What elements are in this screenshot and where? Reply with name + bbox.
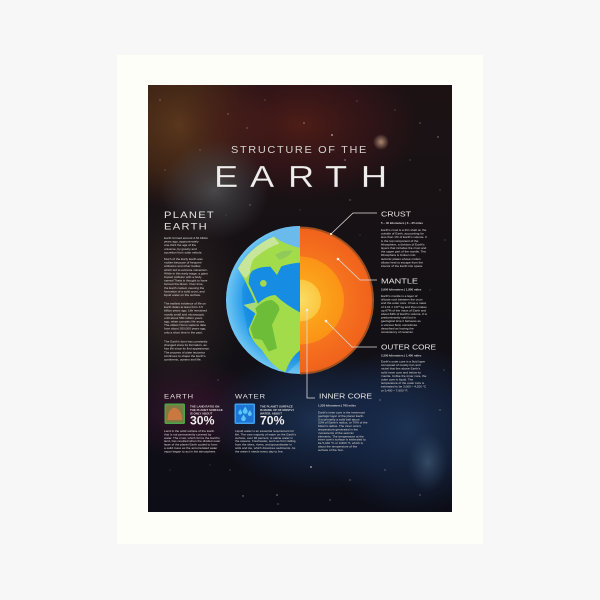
planet earth heading: EARTH bbox=[164, 222, 208, 232]
outer core panel: solid inner core and below its bbox=[381, 370, 421, 374]
outer core layer bbox=[300, 256, 344, 344]
planet earth body: until about 580 million years bbox=[164, 316, 203, 320]
outer core panel: composed of mostly iron and bbox=[381, 363, 421, 367]
inner core layer bbox=[300, 280, 321, 322]
crust panel: outside of Earth, accounting for bbox=[381, 232, 424, 236]
outer core panel: OUTER CORE bbox=[381, 344, 436, 352]
planet earth body: years ago, approximately bbox=[164, 240, 199, 244]
planet earth body: The Earth's form has constantly bbox=[164, 340, 208, 344]
planet earth body: The process of plate tectonics bbox=[164, 350, 206, 354]
outer core panel: estimated to be 3,000 – 4,200 °C bbox=[381, 385, 427, 389]
land caption: THE LAND RATIO ON bbox=[190, 404, 219, 408]
mantle panel: a viscous fluid, sometimes bbox=[381, 323, 418, 327]
planet earth body: the Earth cooled, causing the bbox=[164, 286, 204, 290]
inner core panel: 20% of Earth's radius, or 70% of the bbox=[318, 421, 368, 425]
crust panel: tectonic plates whose motion bbox=[381, 257, 421, 261]
planet earth body: ago, when complex life arose. bbox=[164, 320, 205, 324]
planet earth body: The oldest Homo sapiens date bbox=[164, 323, 206, 327]
planet earth body: named Theia is thought to have bbox=[164, 279, 208, 283]
crust panel: CRUST bbox=[381, 212, 412, 218]
land caption: THE PLANET SURFACE bbox=[190, 408, 223, 412]
crust pointer bbox=[331, 213, 377, 234]
land caption bbox=[190, 404, 223, 416]
planet earth body: only a short time in the past. bbox=[164, 330, 203, 334]
mantle panel: of 4.01 × 10²⁴ kg and thus makes bbox=[381, 305, 427, 309]
outer core panel: outer core is liquid. The bbox=[381, 378, 413, 382]
mantle layer bbox=[300, 228, 372, 372]
mantle panel: and the outer core. It has a mass bbox=[381, 301, 427, 305]
land body: land, has resulted when the divided outer bbox=[164, 439, 220, 443]
planet earth body: billion years ago. Life remained bbox=[164, 309, 207, 313]
crust panel: 5 – 40 kilometers | 3 – 25 miles bbox=[381, 221, 423, 225]
all text panels bbox=[164, 210, 436, 453]
planet earth body: accretion from solar nebula. bbox=[164, 250, 202, 254]
planet earth body: Earth formed around 4.54 billion bbox=[164, 236, 208, 240]
water caption: WATER, ABOUT bbox=[260, 412, 282, 416]
crust panel: is the top component of the bbox=[381, 239, 419, 243]
inner core panel: inner core's surface is estimated to bbox=[318, 438, 366, 442]
land body: that is not permanently covered by bbox=[164, 432, 212, 436]
inner core panel: movements of the seismic bbox=[318, 431, 354, 435]
mantle panel: about 84% of Earth's volume. It is bbox=[381, 312, 427, 316]
crust panel: allows heat to escape from the bbox=[381, 260, 423, 264]
mantle panel: MANTLE bbox=[381, 278, 418, 286]
inner core panel: elements. The temperature at the bbox=[318, 434, 364, 438]
inner core panel: about the temperature of the bbox=[318, 444, 357, 448]
planet earth body: mostly small and microscopic bbox=[164, 312, 205, 316]
inner core panel bbox=[318, 394, 372, 452]
inner core panel: surface of the Sun. bbox=[318, 448, 344, 452]
crust panel: lithosphere is broken into bbox=[381, 253, 416, 257]
planet earth body: universe, by gravity and bbox=[164, 247, 197, 251]
mantle panel: Earth's mantle is a layer of bbox=[381, 294, 417, 298]
outer core panel: mantle. Unlike the inner core, the bbox=[381, 374, 427, 378]
mantle panel: silicate rock between the crust bbox=[381, 298, 423, 302]
land body: layer of the planet Earth cooled to form bbox=[164, 443, 218, 447]
outer core pointer bbox=[326, 321, 377, 347]
planet earth body: collisions and other bodies bbox=[164, 264, 201, 268]
outer core panel: or 5,400 – 7,600 °F. bbox=[381, 388, 408, 392]
water caption: IS MADE UP OF MOSTLY bbox=[260, 408, 294, 412]
land body: Land is the solid surface of the Earth bbox=[164, 429, 214, 433]
planet earth body: has life since its first appearance. bbox=[164, 347, 210, 351]
water stat heading: WATER bbox=[235, 394, 266, 400]
inner core panel: INNER CORE bbox=[319, 394, 372, 400]
planet earth heading bbox=[164, 210, 215, 232]
land body: vapor began to act in the atmosphere. bbox=[164, 449, 216, 453]
planet earth body: one-third the age of the bbox=[164, 243, 196, 247]
callout lines bbox=[307, 213, 377, 398]
white mat bbox=[117, 55, 483, 544]
land icon bbox=[164, 404, 185, 424]
planet earth body: continues to shape the Earth's bbox=[164, 354, 206, 358]
planet earth body: formed the Moon. Over time, bbox=[164, 282, 204, 286]
outer core panel: Earth's outer core is a fluid layer bbox=[381, 360, 425, 364]
outer core panel bbox=[381, 344, 436, 392]
inner core panel: be 5,430 °C or 9,800 °F, which is bbox=[318, 441, 363, 445]
mantle panel: 2,900 kilometers | 1,800 miles bbox=[381, 288, 422, 292]
crust panel: interior of the Earth into space. bbox=[381, 264, 423, 268]
crust panel: Earth's crust is a thin shell on the bbox=[381, 228, 427, 232]
planet earth body: molten because of frequent bbox=[164, 261, 202, 265]
inner core pointer bbox=[307, 310, 315, 398]
70 percent: 70% bbox=[260, 414, 285, 428]
inner core panel: Earth's inner core is the innermost bbox=[318, 410, 365, 414]
crust panel bbox=[381, 212, 427, 268]
crust panel: the upper part of the mantle. The bbox=[381, 250, 426, 254]
title: STRUCTURE OF THE bbox=[231, 145, 368, 156]
crust panel: layers that includes the crust and bbox=[381, 246, 427, 250]
inner core panel: It is primarily a solid ball about bbox=[318, 417, 360, 421]
water caption: THE PLANET SURFACE bbox=[260, 404, 293, 408]
inner core panel: 1,220 kilometers | 760 miles bbox=[318, 404, 356, 408]
planet earth body: formation of a solid crust, and bbox=[164, 289, 205, 293]
water body: from the skies, rivers, and groundwater in bbox=[235, 443, 292, 447]
mantle panel: geological time it behaves as bbox=[381, 319, 421, 323]
planet earth body: Much of the Early Earth was bbox=[164, 257, 203, 261]
crust layer bbox=[300, 226, 374, 374]
planet earth body: Earth dates at least from 3.5 bbox=[164, 305, 203, 309]
planet earth body: liquid water on the surface. bbox=[164, 293, 201, 297]
land body: water. The crust, which forms the Earth's bbox=[164, 436, 220, 440]
mantle panel: predominantly solid but in bbox=[381, 316, 416, 320]
outer core panel: temperature of the outer core is bbox=[381, 381, 425, 385]
30 percent: 30% bbox=[190, 414, 215, 428]
mantle panel: up 67% of the mass of Earth and bbox=[381, 308, 426, 312]
water body: life. The vast majority of water on the Earth's bbox=[235, 432, 296, 436]
planet earth body: which led to extreme volcanism. bbox=[164, 268, 208, 272]
water body bbox=[235, 429, 296, 453]
planet earth body: continents, oceans and life. bbox=[164, 358, 202, 362]
poster background bbox=[148, 85, 452, 512]
inner core panel: geologic layer of the planet Earth. bbox=[318, 414, 364, 418]
earth stat heading: EARTH bbox=[164, 394, 194, 400]
mantle pointer bbox=[338, 259, 377, 280]
planet earth body: impact collision with a body bbox=[164, 275, 202, 279]
water body: Liquid water is an essential requirement for bbox=[235, 429, 294, 433]
planet earth body: changed since its formation, as bbox=[164, 343, 207, 347]
planet earth body bbox=[164, 236, 210, 362]
inner core panel: Moon's radius. The inner core's bbox=[318, 424, 361, 428]
planet earth body: The earliest evidence of life on bbox=[164, 302, 206, 306]
crust panel: less than 1% of Earth's volume. It bbox=[381, 235, 427, 239]
water icon bbox=[234, 404, 255, 424]
water body: the water it needs every day to live. bbox=[235, 449, 284, 453]
earth surface half bbox=[226, 226, 300, 374]
planet earth body: from about 300,000 years ago, bbox=[164, 327, 206, 331]
outer core panel: 2,300 kilometers | 1,400 miles bbox=[381, 354, 422, 358]
earth illustration bbox=[226, 226, 374, 374]
mantle panel: consistency of caramel. bbox=[381, 330, 413, 334]
water body: the oceans. Freshwater, such as from falling bbox=[235, 439, 296, 443]
mantle panel bbox=[381, 278, 427, 334]
planet earth body: While in this early stage, a giant bbox=[164, 271, 208, 275]
inner core panel: temperature generated in the bbox=[318, 428, 358, 432]
land body: a solid mass as the accumulated water bbox=[164, 446, 217, 450]
title: EARTH bbox=[214, 159, 387, 194]
planet earth heading: PLANET bbox=[164, 210, 215, 220]
mantle panel: described as having the bbox=[381, 326, 414, 330]
outer core panel: nickel that lies above Earth's bbox=[381, 367, 421, 371]
land caption: IS ONLY ABOUT bbox=[190, 412, 212, 416]
water body: soils and ice, which dissolves sediments. As bbox=[235, 446, 296, 450]
crust panel: lithosphere, a division of Earth's bbox=[381, 242, 425, 246]
water body: surface, over 96 percent, is saline water in bbox=[235, 436, 293, 440]
water caption bbox=[260, 404, 294, 416]
callout dots bbox=[306, 233, 339, 322]
land body bbox=[164, 429, 220, 453]
